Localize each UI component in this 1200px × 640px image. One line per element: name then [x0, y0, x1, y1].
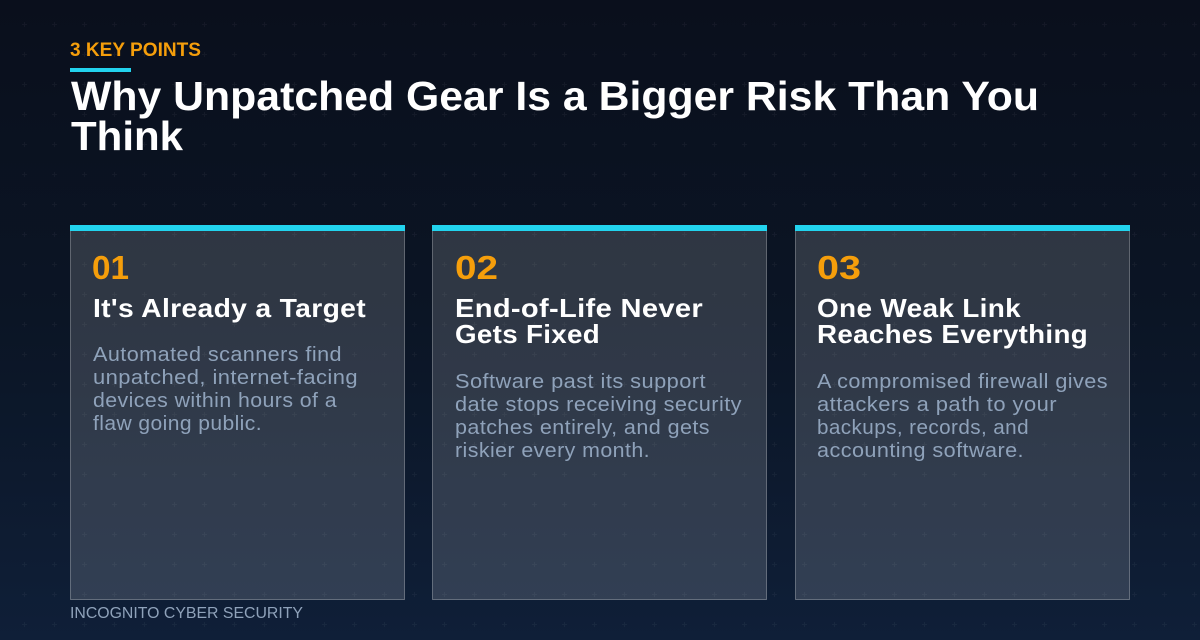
footer brand: INCOGNITO CYBER SECURITY [70, 605, 303, 622]
body 1: Automated scanners find [93, 344, 342, 366]
body 3: accounting software. [817, 440, 1024, 462]
card 1 text [92, 249, 366, 435]
heading 2: Gets Fixed [455, 319, 600, 349]
accent underline [70, 68, 131, 72]
number 01: 01 [92, 249, 129, 286]
body 1: unpatched, internet-facing [93, 367, 358, 389]
panel: card 2 [432, 225, 767, 600]
heading 2: End-of-Life Never [455, 293, 703, 323]
eyebrow label: 3 KEY POINTS [70, 40, 201, 61]
body 3: attackers a path to your [817, 394, 1057, 416]
body 2: patches entirely, and gets [455, 417, 710, 439]
card 3 text [817, 249, 1108, 462]
body 3 [817, 371, 1108, 462]
heading 3: One Weak Link [817, 293, 1021, 323]
panel: card 3 [795, 225, 1130, 600]
body 1: devices within hours of a [93, 390, 337, 412]
body 3: A compromised firewall gives [817, 371, 1108, 393]
card 2 text [455, 249, 742, 462]
body 2: date stops receiving security [455, 394, 742, 416]
body 2 [455, 371, 742, 462]
heading 3 [817, 293, 1088, 349]
number 03: 03 [817, 249, 861, 286]
heading 2 [455, 293, 703, 349]
title [71, 73, 1039, 159]
heading 3: Reaches Everything [817, 319, 1088, 349]
title: Why Unpatched Gear Is a Bigger Risk Than You [71, 73, 1039, 119]
panel: card 1 [70, 225, 405, 600]
body 2: riskier every month. [455, 440, 650, 462]
body 1 [93, 344, 358, 435]
heading 1: It's Already a Target [93, 293, 366, 323]
number 02: 02 [455, 249, 498, 286]
body 2: Software past its support [455, 371, 706, 393]
body 1: flaw going public. [93, 413, 262, 435]
body 3: backups, records, and [817, 417, 1029, 439]
title: Think [71, 113, 183, 159]
